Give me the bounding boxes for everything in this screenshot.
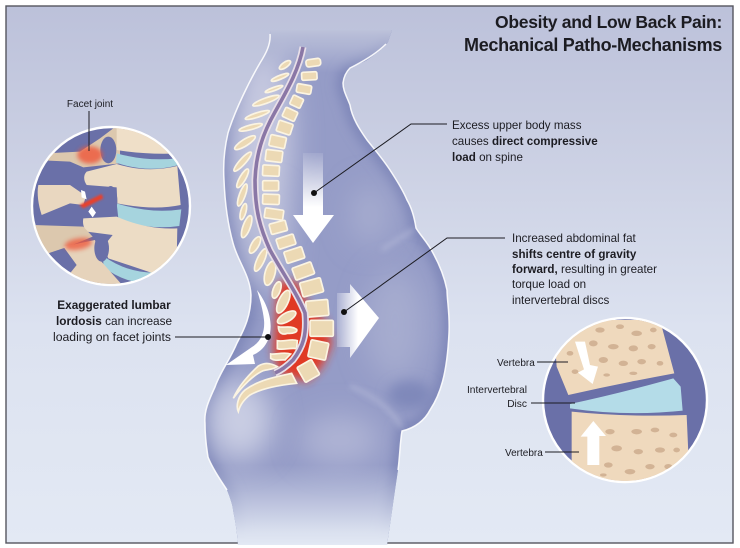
label: intervertebral disc: Disc <box>507 399 527 410</box>
label: vertebra upper: Vertebra <box>497 358 535 369</box>
bone texture <box>567 324 680 477</box>
title <box>464 12 722 55</box>
label: vertebra lower <box>505 448 579 459</box>
arrow: forward shift <box>337 284 379 358</box>
text: compressive load: causes direct compressive <box>452 135 598 148</box>
text: lordosis: loading on facet joints <box>53 330 171 344</box>
foramina <box>100 137 116 163</box>
inset: disc <box>543 318 707 490</box>
title: Obesity and Low Back Pain: <box>495 12 722 32</box>
label: facet joint <box>67 99 113 151</box>
small arrows <box>81 190 87 199</box>
text: abdominal fat: torque load on <box>512 278 586 291</box>
text: compressive load: Excess upper body mass <box>452 119 582 132</box>
disc 1 <box>116 153 177 169</box>
leader: lordosis <box>175 334 271 340</box>
vertebra 2 <box>84 164 181 207</box>
spinal canal <box>255 47 306 373</box>
text: compressive load: load on spine <box>452 151 523 164</box>
spine <box>232 47 333 412</box>
intervertebral disc <box>570 378 683 413</box>
text: lordosis <box>53 298 172 344</box>
leader: compressive load <box>311 124 447 196</box>
title: Mechanical Patho-Mechanisms <box>464 35 722 55</box>
label: vertebra lower: Vertebra <box>505 448 543 459</box>
arrow: compressive load <box>293 153 334 243</box>
arrow: down <box>575 342 598 384</box>
chest crease <box>382 229 414 250</box>
red inflammation glow <box>273 282 332 382</box>
text: lordosis: lordosis can increase <box>56 314 172 328</box>
arrow: up <box>581 421 606 465</box>
disc 3 <box>103 258 152 281</box>
text: abdominal fat: forward, resulting in greater <box>512 263 657 276</box>
vertebra 1 <box>116 128 169 154</box>
lower vertebra <box>572 412 688 481</box>
label: intervertebral disc: Intervertebral <box>467 385 527 396</box>
leader: abdominal fat <box>341 238 505 315</box>
upper spine bones <box>232 58 321 220</box>
upper lamina <box>48 128 120 168</box>
vertebra 3 <box>83 217 177 273</box>
text: abdominal fat: shifts centre of gravity <box>512 248 637 261</box>
label: facet joint: Facet joint <box>67 99 113 110</box>
lower processes <box>33 225 93 253</box>
label: intervertebral disc <box>467 385 575 410</box>
text: lordosis: Exaggerated lumbar <box>57 298 171 312</box>
lower spine bones <box>233 208 333 412</box>
inset: facet joint <box>32 123 190 290</box>
disc 2 <box>117 203 181 227</box>
upper vertebra <box>553 320 674 395</box>
body silhouette <box>195 20 460 545</box>
arrow: lordosis curve <box>226 290 271 365</box>
belly crease <box>350 386 402 428</box>
text: abdominal fat <box>512 232 657 307</box>
body rim: front <box>343 44 449 470</box>
middle process <box>38 185 86 215</box>
red facet glow <box>77 146 103 164</box>
text: compressive load <box>452 119 598 164</box>
text: abdominal fat: Increased abdominal fat <box>512 232 637 245</box>
body rim: back <box>205 34 270 490</box>
text: abdominal fat: intervertebral discs <box>512 294 609 307</box>
label: vertebra upper <box>497 358 568 369</box>
